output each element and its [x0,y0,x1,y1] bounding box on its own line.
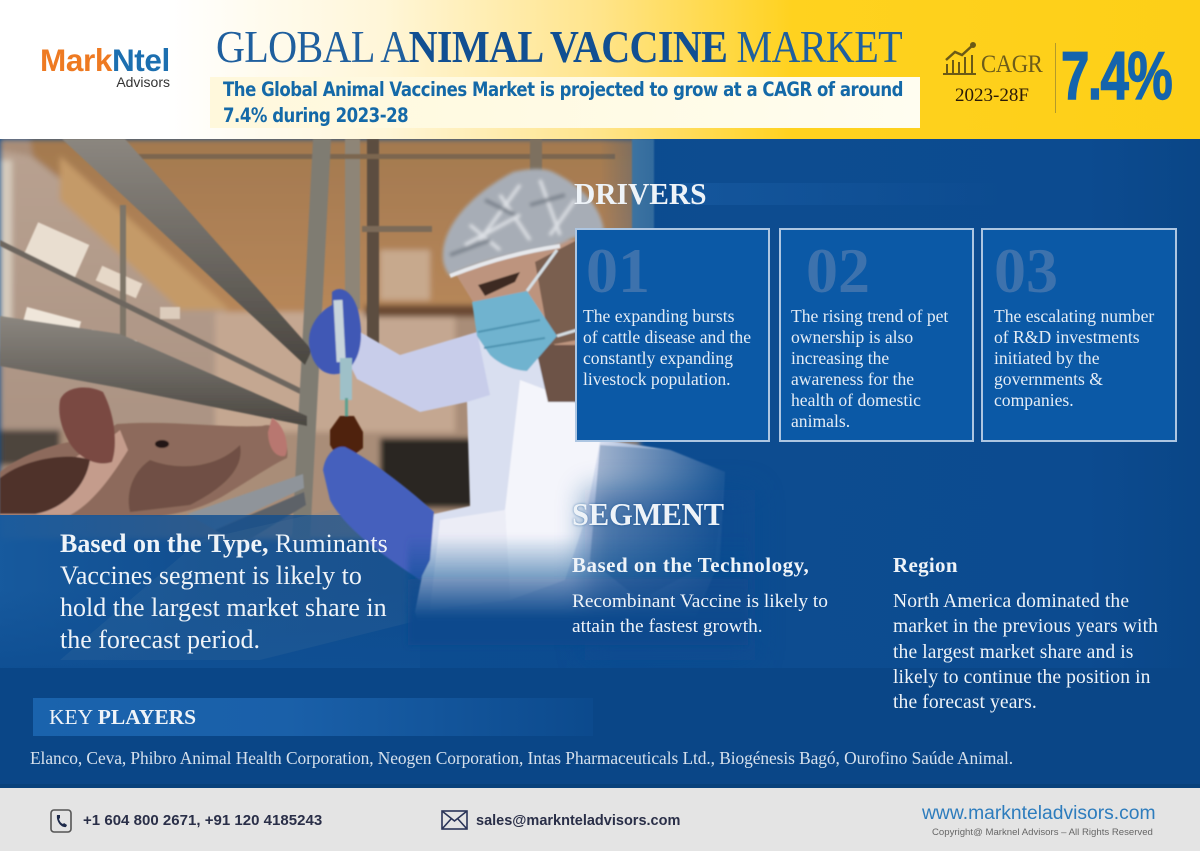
icon: phone [50,809,72,833]
region segment [893,553,1158,713]
neck and face [533,336,577,402]
bottom-left blue overlay [0,515,420,670]
heading: drivers: DRIVERS [574,176,707,211]
driver card 02 [779,228,974,442]
header band [0,0,1200,139]
email: sales@marknteladvisors.com [476,813,680,829]
title: GLOBAL ANIMAL VACCINE MARKET [216,21,902,72]
driver card 02: The rising trend of pet [791,306,948,326]
type segment callout [60,529,388,654]
region segment: the largest market share and is [893,642,1134,663]
key players list: Elanco, Ceva, Phibro Animal Health Corporation, Neogen Corporation, Intas Pharmaceuticals Ltd., Biogénesis Bagó, Ourofino Saúde Animal. [30,748,1013,768]
driver card 01 [575,228,770,442]
fades over the vet and right edge [600,139,740,788]
barn background [0,139,640,539]
CAGR badge: 2023-28F [955,85,1029,106]
logo: Advisors [116,74,170,90]
subtitle [210,77,920,128]
driver card 01: 01 [586,235,650,306]
hero photo: vet with pig in barn [0,139,1200,788]
technology segment [572,553,828,637]
driver card 03: 03 [994,235,1058,306]
region segment: market in the previous years with [893,616,1158,637]
region segment: North America dominated the [893,591,1129,612]
driver card 03: governments & [994,369,1103,389]
subtitle: 7.4% during 2023-28 [223,104,408,127]
footer [0,788,1200,851]
subtitle: The Global Animal Vaccines Market is projected to grow at a CAGR of around [223,78,903,101]
driver card 02: 02 [806,235,870,306]
driver card 03: of R&D investments [994,327,1140,347]
driver card 01: constantly expanding [583,348,733,368]
driver card 03: companies. [994,390,1074,410]
pig [0,387,288,516]
type segment callout: Vaccines segment is likely to [60,561,362,590]
technology segment: attain the fastest growth. [572,616,763,637]
logo: MarkNtel [40,42,170,78]
vet [309,169,725,630]
driver card 02: increasing the [791,348,889,368]
driver card 02: animals. [791,411,850,431]
region segment: the forecast years. [893,692,1037,713]
mask [472,291,557,371]
key players banner [33,698,593,736]
driver card 02: ownership is also [791,327,913,347]
CAGR badge [943,38,1172,114]
driver card 01: The expanding bursts [583,306,734,326]
copyright: Copyright@ Marknel Advisors – All Rights Reserved [932,827,1153,838]
heading: segment: SEGMENT [572,496,724,532]
driver card 03: The escalating number [994,306,1154,326]
region segment: Region [893,553,958,577]
type segment callout: the forecast period. [60,625,260,654]
website: www.marknteladvisors.com [922,803,1156,824]
icon: envelope [441,810,468,830]
driver card 02: health of domestic [791,390,921,410]
driver card 01: livestock population. [583,369,731,389]
key players banner: KEY PLAYERS [49,705,196,729]
technology segment: Based on the Technology, [572,553,809,577]
phone numbers: +1 604 800 2671, +91 120 4185243 [83,812,322,829]
hands, syringe, bottle [309,289,361,374]
type segment callout: Based on the Type, Ruminants [60,529,388,558]
technology segment: Recombinant Vaccine is likely to [572,591,828,612]
arm [345,332,490,412]
driver card 03: initiated by the [994,348,1100,368]
CAGR badge: 7.4% [1061,38,1171,114]
rails, posts, windows [0,139,654,545]
driver card 02: awareness for the [791,369,914,389]
hairnet [443,169,604,276]
icon: growth chart [943,42,976,75]
driver card 01: of cattle disease and the [583,327,751,347]
type segment callout: hold the largest market share in [60,593,387,622]
torso and coat [415,332,725,630]
driver card 03 [981,228,1177,442]
region segment: likely to continue the position in [893,667,1151,688]
CAGR badge: CAGR [981,51,1042,78]
